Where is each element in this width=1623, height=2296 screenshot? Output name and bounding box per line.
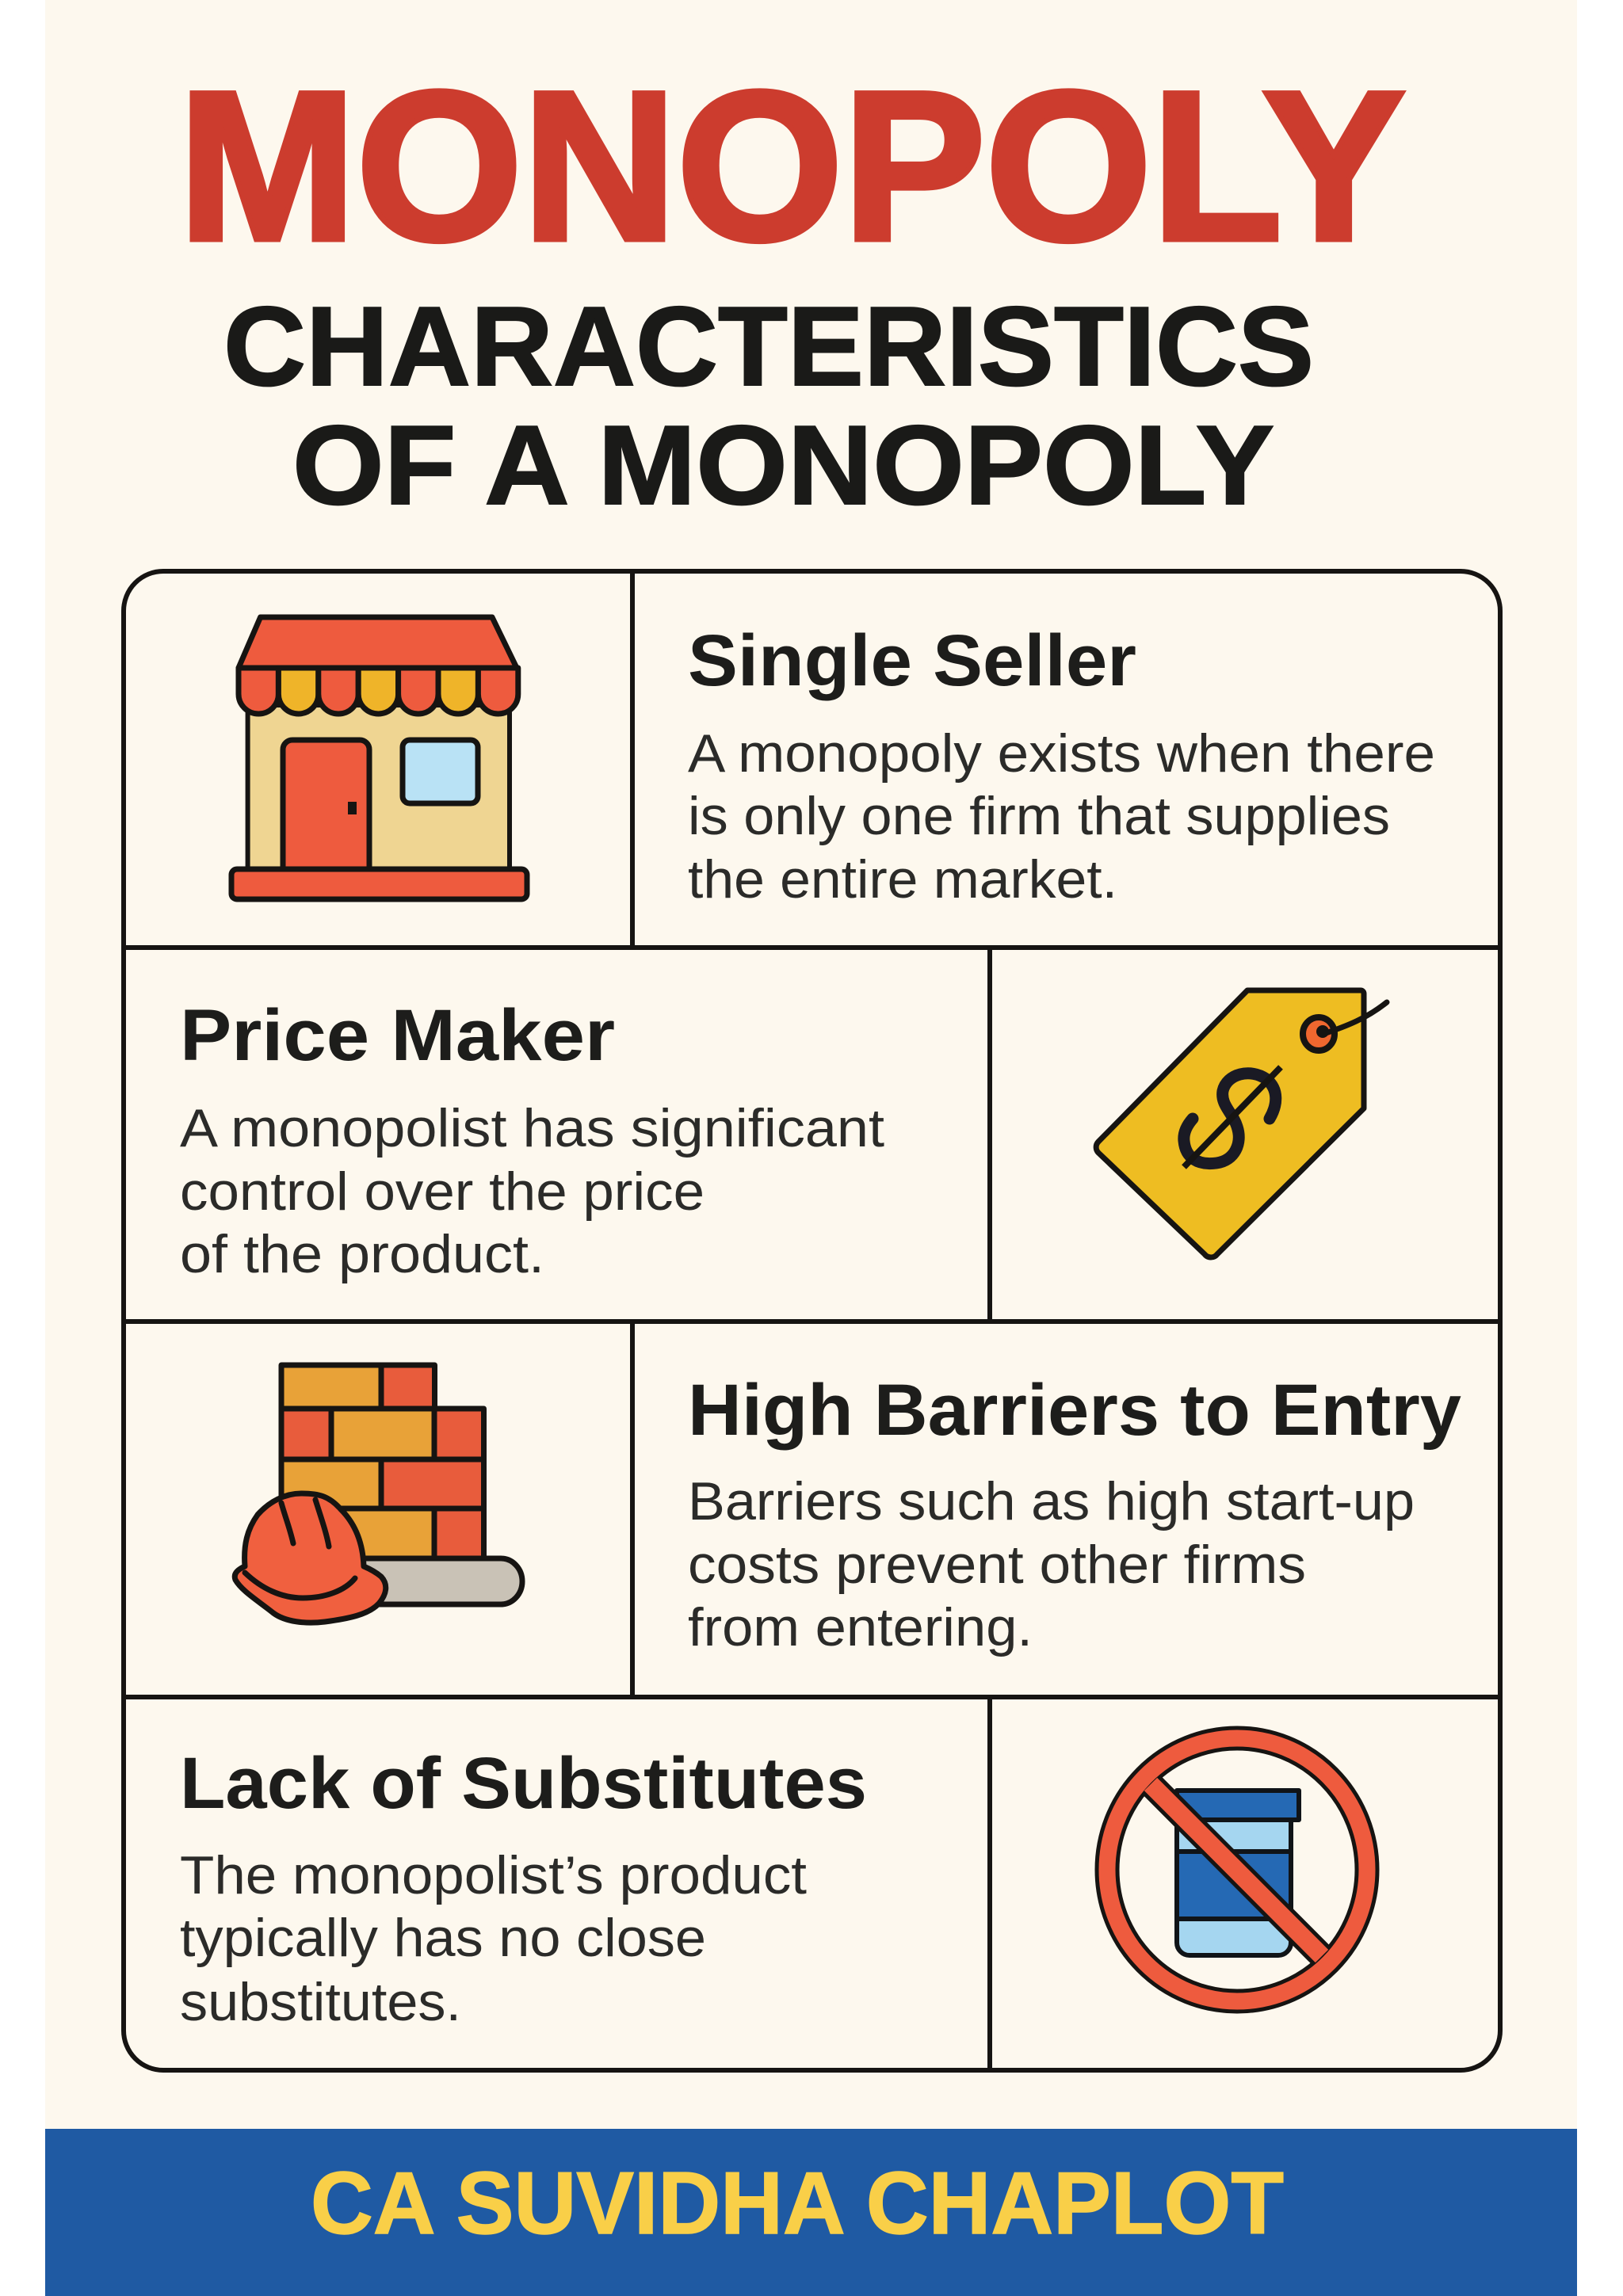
icon: storefront xyxy=(231,617,527,899)
text: lack of substitutes: Lack of Substitutes xyxy=(180,1743,867,1824)
icon: brick wall and hard hat xyxy=(235,1365,522,1623)
text: single seller: Single Seller xyxy=(688,620,1136,701)
text: single seller: the entire market. xyxy=(688,849,1117,910)
text: high barriers to entry xyxy=(688,1370,1461,1657)
text: price maker: control over the price xyxy=(180,1161,705,1222)
text: single seller xyxy=(688,620,1435,910)
text: high barriers to entry: from entering. xyxy=(688,1597,1033,1657)
text: high barriers to entry: Barriers such as high start-up xyxy=(688,1471,1415,1531)
footer banner: CA SUVIDHA CHAPLOT xyxy=(311,2154,1284,2252)
footer banner xyxy=(45,2129,1577,2296)
text: single seller: A monopoly exists when there xyxy=(688,723,1435,784)
heading: characteristics of a monopoly: CHARACTERISTICS xyxy=(223,284,1314,410)
text: single seller: is only one firm that supplies xyxy=(688,786,1390,846)
text: lack of substitutes: substitutes. xyxy=(180,1972,461,2032)
bricks xyxy=(281,1365,522,1604)
text: high barriers to entry: costs prevent other firms xyxy=(688,1535,1306,1595)
text: price maker: A monopolist has significant xyxy=(180,1098,884,1158)
text: lack of substitutes: typically has no close xyxy=(180,1908,706,1968)
icon: price tag with dollar sign xyxy=(1096,990,1387,1257)
jar xyxy=(1177,1791,1299,1955)
heading: characteristics of a monopoly xyxy=(223,284,1314,528)
text: lack of substitutes xyxy=(180,1743,867,2032)
text: high barriers to entry: High Barriers to Entry xyxy=(688,1370,1461,1451)
text: price maker xyxy=(180,995,884,1284)
title: MONOPOLY: MONOPOLY xyxy=(178,47,1405,284)
heading: characteristics of a monopoly: OF A MONOPOLY xyxy=(292,402,1274,528)
text: price maker: of the product. xyxy=(180,1224,544,1284)
text: lack of substitutes: The monopolist’s product xyxy=(180,1845,807,1905)
icon: crossed-out product jar xyxy=(1107,1738,1367,2001)
text: price maker: Price Maker xyxy=(180,995,615,1076)
panel: characteristics table frame xyxy=(124,571,1500,2070)
prohibition ring and slash xyxy=(1107,1738,1367,2001)
hard hat xyxy=(235,1493,386,1623)
